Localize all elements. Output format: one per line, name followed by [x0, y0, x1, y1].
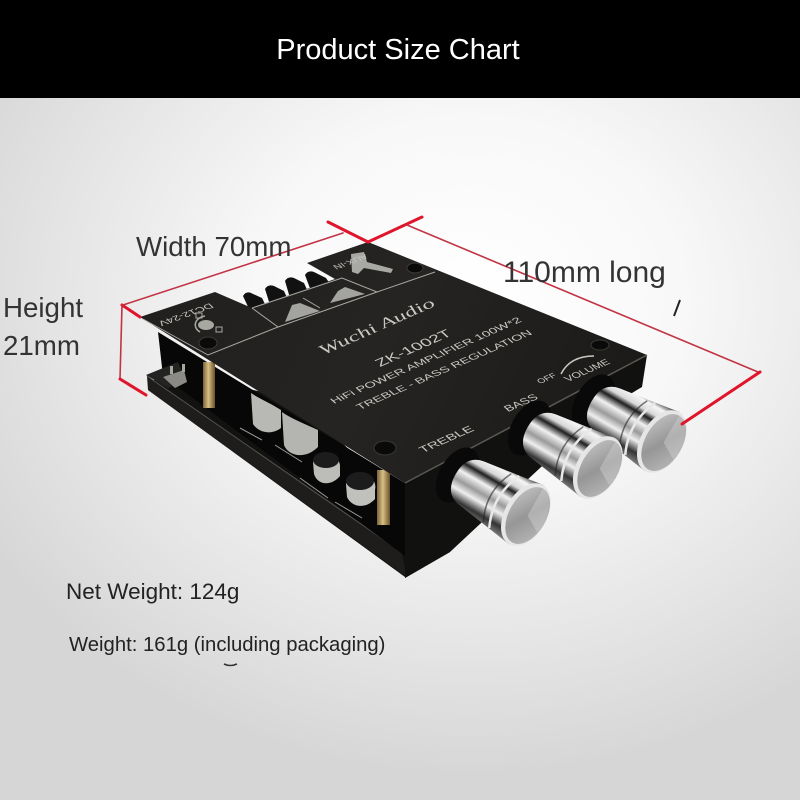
off label: OFF: [535, 371, 559, 385]
plate printed lines: [143, 272, 435, 355]
volume label: VOLUME: [562, 358, 613, 384]
plate text: [155, 253, 613, 455]
speaker icons: [285, 287, 365, 322]
dimension lines: [120, 217, 760, 424]
model: ZK-1002T: [372, 328, 456, 369]
brand: Wuchi Audio: [313, 296, 439, 357]
line one: HiFi POWER AMPLIFIER 100W*2: [328, 316, 524, 406]
width dimension: [122, 222, 368, 317]
stray mark: [224, 664, 237, 666]
capacitors: [251, 393, 375, 506]
aux jack icon: [351, 252, 393, 274]
length label: 110mm long: [503, 256, 666, 289]
dc label: DC12-24V: [155, 301, 215, 327]
line two: TREBLE - BASS REGULATION: [354, 329, 535, 412]
height dimension: [120, 305, 146, 395]
gross weight: Weight: 161g (including packaging): [69, 634, 385, 656]
icons on plate: [195, 252, 393, 332]
brass standoffs: [203, 362, 390, 525]
silkscreen traces: [240, 428, 362, 518]
height label: Height: [3, 292, 83, 323]
solder terminal: [146, 362, 186, 388]
bass label: BASS: [501, 392, 541, 414]
treble label: TREBLE: [416, 423, 477, 455]
width label: Width 70mm: [136, 231, 291, 262]
title: Product Size Chart: [276, 34, 520, 66]
height label: 21mm: [3, 330, 80, 361]
front face: [405, 355, 647, 578]
lower circuit board: [148, 370, 450, 592]
net weight: Net Weight: 124g: [66, 579, 239, 604]
length dimension: [368, 217, 760, 424]
stray mark: [674, 300, 680, 316]
screws: [199, 263, 609, 455]
aux label: AUX-IN: [331, 253, 370, 271]
photo: amplifier board: [140, 242, 697, 592]
header bar: [0, 0, 800, 98]
power jack icon: [195, 313, 222, 332]
heat sink fins: [243, 271, 330, 311]
top plate: [140, 242, 647, 483]
knobs: [425, 364, 697, 554]
side interior: [158, 332, 405, 556]
